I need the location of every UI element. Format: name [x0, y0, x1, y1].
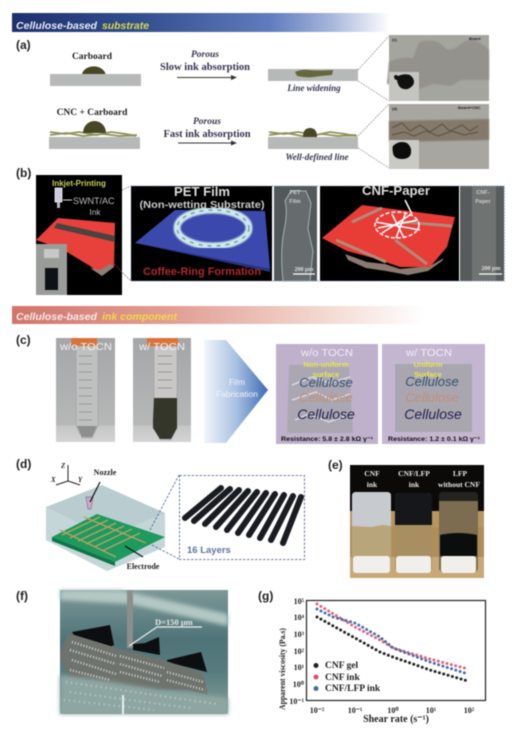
pet film panel: (Non-wetting Substrate)	[140, 200, 264, 211]
x axis ticks	[310, 706, 475, 715]
label (e): (e)	[328, 458, 343, 472]
pet film panel: PET Film	[174, 185, 230, 199]
xyz axes icon: Z	[60, 462, 66, 470]
x axis ticks: 10⁰	[387, 706, 399, 715]
inkjet printing panel: Ink	[89, 207, 101, 217]
film with tocn: Cellulose	[404, 406, 462, 422]
banner: cellulose-based ink component	[12, 306, 425, 324]
microscope photo	[60, 590, 228, 714]
black printed ridges	[72, 625, 207, 672]
label (d): (d)	[16, 457, 31, 471]
cnf paper sem image: 200 μm	[482, 266, 500, 272]
connector lines to micrograph c	[358, 36, 389, 101]
connector lines to micrograph d	[358, 104, 389, 168]
vial photo: LFP	[453, 469, 467, 478]
arrow: film fabrication: Fabrication	[216, 389, 258, 399]
panel (e): ink vials	[328, 458, 484, 578]
inkjet printing panel	[36, 175, 122, 295]
cnf paper sem image	[460, 186, 504, 281]
y axis ticks: 10⁴	[294, 613, 305, 622]
fibre network	[375, 200, 420, 238]
printed comb	[185, 488, 301, 543]
panel (f): printed structure photo	[16, 589, 228, 714]
inkjet printing panel: Inkjet-Printing	[52, 179, 106, 188]
label (c): (c)	[16, 333, 31, 347]
arrow: film fabrication: Film	[229, 377, 245, 387]
cnc carboard heading: CNC + Carboard	[57, 108, 128, 118]
xyz axes icon	[50, 462, 83, 485]
pet film panel	[131, 185, 272, 281]
plot frame	[306, 600, 486, 700]
vial photo: without CNF	[438, 480, 480, 489]
nozzle needle	[127, 590, 133, 648]
tube with tocn	[133, 338, 191, 442]
banner: cellulose-based ink component: Cellulose-based	[16, 311, 98, 323]
y axis ticks	[289, 597, 305, 706]
x axis title: Shear rate (s⁻¹)	[363, 714, 429, 725]
legend: CNF/LFP ink	[325, 684, 381, 694]
panel (d): 3d printing of electrode	[16, 457, 304, 571]
film without tocn: w/o TOCN	[300, 347, 353, 359]
micrograph: board: Board	[469, 36, 481, 41]
panel (a): carboard schematics	[16, 35, 489, 169]
y axis ticks: 10⁵	[294, 597, 305, 606]
inkjet printing panel: SWNT/AC	[73, 196, 115, 206]
vial: cnf/lfp ink	[395, 493, 432, 573]
16 layers inset	[180, 476, 304, 560]
film with tocn: Surface	[414, 370, 442, 379]
pet film panel: Coffee-Ring Formation	[143, 266, 261, 278]
red cnf sheet	[345, 254, 444, 275]
widened line slab	[268, 69, 358, 81]
connector lines	[150, 475, 179, 559]
micrograph: board plus cnc: Board+CNC	[458, 105, 481, 110]
film without tocn: Non-uniform	[304, 360, 349, 369]
film with tocn: Uniform	[414, 360, 443, 369]
tube without tocn: w/o TOCN	[59, 341, 112, 353]
film with tocn	[382, 344, 485, 444]
16 layers inset: 16 Layers	[187, 545, 231, 556]
diameter callout	[129, 627, 202, 646]
arrow: slow absorption	[177, 75, 237, 80]
micrograph: board plus cnc: (d)	[392, 106, 398, 111]
well-defined line caption: Well-defined line	[285, 152, 349, 162]
film without tocn: Cellulose	[299, 375, 353, 390]
line widening caption: Line widening	[286, 83, 341, 93]
x axis ticks: 10²	[464, 706, 475, 715]
vial: lfp without cnf	[439, 492, 478, 573]
film with tocn: w/ TOCN	[405, 347, 452, 359]
film with tocn: Cellulose	[405, 390, 459, 405]
rough printed electrode	[60, 633, 208, 695]
banner: cellulose-based substrate: Cellulose-based	[16, 20, 98, 32]
well-defined line slab	[268, 128, 358, 149]
cnf paper sem image: CNF-	[476, 190, 490, 196]
cnf paper sem image: Paper	[475, 199, 491, 205]
carboard slab with ink drop	[50, 66, 141, 86]
film without tocn	[276, 344, 378, 444]
xyz axes icon: X	[50, 476, 56, 484]
slow absorption text: Porous	[191, 50, 219, 60]
pet film sem image	[274, 186, 317, 281]
banner: cellulose-based substrate: substrate	[102, 20, 149, 32]
tube with tocn: w/ TOCN	[138, 341, 185, 353]
blue substrate	[135, 210, 270, 269]
micrograph: board: (c)	[392, 37, 398, 42]
ink vial inset	[36, 244, 67, 295]
y axis ticks: 10¹	[294, 663, 305, 672]
film with tocn: Cellulose	[405, 374, 459, 389]
cnc slab with fibres and drop	[49, 121, 140, 149]
slow absorption text	[160, 50, 250, 73]
film without tocn: Cellulose	[299, 390, 353, 405]
micrograph: board	[387, 35, 489, 101]
x axis ticks: 10⁻²	[310, 706, 325, 715]
label (a): (a)	[16, 38, 31, 52]
fast absorption text: Porous	[193, 117, 221, 127]
vial photo: CNF	[364, 469, 380, 478]
red paper sheet	[36, 218, 115, 276]
x axis ticks: 10⁻¹	[348, 706, 363, 715]
banner: cellulose-based substrate	[12, 13, 390, 32]
micrograph: board plus cnc	[389, 104, 489, 169]
pet film sem image: PET	[290, 190, 301, 196]
y axis ticks: 10²	[294, 647, 305, 656]
arrow: film fabrication	[204, 340, 268, 443]
tube without tocn	[56, 338, 115, 442]
film with tocn: Resistance: 1.2 ± 0.1 kΩ γ⁻¹	[388, 436, 480, 443]
legend	[314, 661, 381, 694]
cnf paper panel: CNF-Paper	[362, 183, 430, 198]
nozzle tip	[86, 497, 93, 509]
pet film sem image: 200 μm	[295, 267, 313, 273]
electrode label: Electrode	[127, 562, 160, 571]
vial photo: CNF/LFP	[398, 469, 430, 478]
vial: cnf ink	[352, 492, 391, 573]
cnf paper panel	[320, 183, 459, 281]
coffee ring	[177, 210, 249, 246]
film without tocn: Resistance: 5.8 ± 2.8 kΩ γ⁻¹	[281, 436, 373, 443]
x axis ticks: 10¹	[426, 706, 437, 715]
dotted frame	[131, 186, 504, 281]
y axis ticks: 10³	[294, 630, 305, 639]
printing bath with electrode	[46, 482, 165, 571]
banner: cellulose-based ink component: ink component	[102, 311, 178, 323]
series: cnf gel	[317, 617, 468, 681]
zoom connector lines	[112, 186, 131, 281]
label (b): (b)	[16, 166, 31, 180]
label (f): (f)	[16, 589, 28, 603]
panel (b): inkjet printing comparison	[16, 166, 504, 295]
fast absorption text	[164, 117, 251, 140]
carboard heading: Carboard	[72, 52, 113, 62]
series: cnf ink	[317, 604, 468, 669]
arrow: fast absorption	[178, 140, 237, 146]
y axis title: Apparent viscosity (Pa.s)	[278, 628, 287, 710]
film without tocn: Cellulose	[297, 406, 355, 422]
series: cnf/lfp ink	[317, 609, 468, 674]
panel (c): tocn films	[16, 333, 485, 444]
pet film sem image: Film	[289, 199, 301, 205]
label (g): (g)	[258, 589, 273, 603]
film without tocn: surface	[313, 370, 339, 379]
nozzle icon	[55, 188, 72, 208]
nozzle label: Nozzle	[94, 468, 117, 477]
vial photo	[350, 465, 484, 578]
vial photo: ink	[409, 480, 420, 489]
xyz axes icon: Y	[78, 476, 83, 484]
legend: CNF ink	[325, 673, 360, 683]
slow absorption text: Slow ink absorption	[160, 62, 250, 73]
vial photo: ink	[367, 480, 378, 489]
panel (g): viscosity chart	[258, 589, 486, 725]
y axis ticks: 10⁻¹	[289, 697, 305, 706]
y axis ticks: 10⁰	[293, 680, 305, 689]
fast absorption text: Fast ink absorption	[164, 129, 251, 140]
microscope photo: D=150 μm	[155, 617, 193, 627]
legend: CNF gel	[325, 661, 359, 671]
